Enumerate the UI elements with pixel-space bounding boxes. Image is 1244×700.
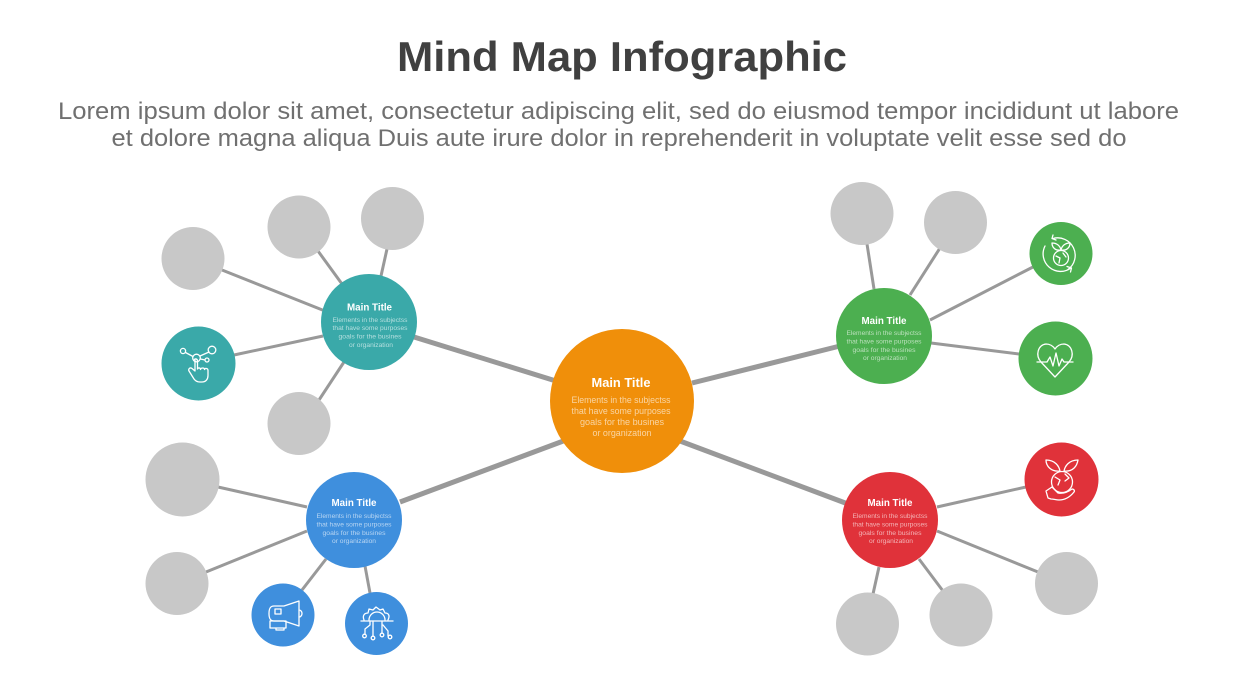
- panel: teal branch: Elements in the subjectss: [332, 317, 408, 324]
- subtitle text: Lorem ipsum dolor sit amet, consectetur adipiscing elit, sed do eiusmod tempor incididunt ut labore: [58, 98, 1179, 125]
- panel: teal branch: Main Title: [347, 302, 392, 314]
- subtitle text: et dolore magna aliqua Duis aute irure dolor in reprehenderit in voluptate velit esse sed do: [112, 125, 1126, 152]
- panel: blue branch: Elements in the subjectss: [316, 513, 392, 520]
- icon: gear with circuit: [345, 592, 408, 655]
- panel: red branch: Main Title: [868, 497, 913, 509]
- panel: blue branch: [306, 472, 402, 568]
- panel: green branch: Elements in the subjectss: [846, 330, 922, 337]
- panel: teal branch: that have some purposes: [332, 325, 408, 332]
- panel: green branch: or organization: [863, 355, 907, 362]
- panel: blue branch: or organization: [332, 538, 376, 545]
- icon: megaphone: [252, 584, 314, 646]
- panel: blue branch: that have some purposes: [316, 522, 392, 528]
- center node: Elements in the subjectss: [572, 395, 671, 405]
- panel: teal branch: [321, 274, 417, 370]
- main connectors: [400, 337, 848, 504]
- center node: that have some purposes: [572, 406, 671, 416]
- panel: green branch: [836, 288, 932, 384]
- branch connectors: [206, 244, 1038, 594]
- panel: blue branch: Main Title: [332, 497, 377, 509]
- panel: teal branch: or organization: [349, 342, 393, 349]
- icon: hand touching network: [162, 326, 236, 400]
- panel: red branch: that have some purposes: [852, 522, 928, 528]
- panel: green branch: goals for the busines: [852, 347, 916, 354]
- panel: red branch: [842, 472, 938, 568]
- panel: teal branch: goals for the busines: [338, 334, 402, 340]
- panel: green branch: Main Title: [862, 315, 907, 327]
- panel: red branch: Elements in the subjectss: [852, 513, 928, 520]
- panel: blue branch: goals for the busines: [322, 530, 386, 537]
- center node: [550, 329, 694, 473]
- icon: globe in hand with leaves: [1024, 442, 1098, 516]
- panel: green branch: that have some purposes: [846, 338, 922, 346]
- center node: Main Title: [592, 376, 651, 390]
- panel: red branch: or organization: [869, 538, 913, 545]
- icon: heart with pulse: [1018, 322, 1092, 396]
- icon: recycling plant globe: [1030, 222, 1092, 285]
- empty grey nodes: [146, 182, 1098, 656]
- panel: red branch: goals for the busines: [858, 530, 922, 537]
- center node: or organization: [592, 428, 652, 438]
- center node: goals for the busines: [580, 417, 664, 427]
- title: Mind Map Infographic: [397, 33, 847, 80]
- subtitle text: [58, 98, 1179, 152]
